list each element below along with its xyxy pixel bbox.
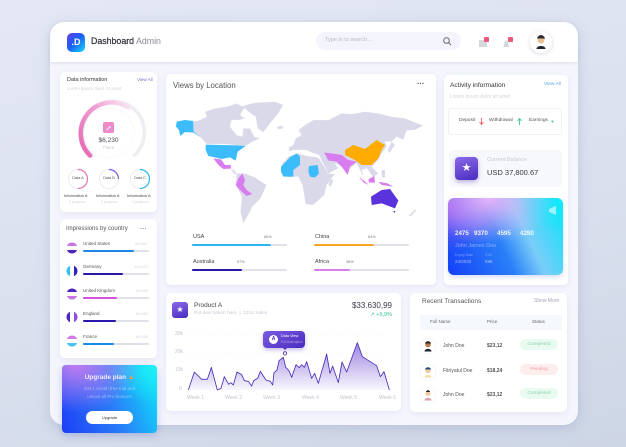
row: united kingdom: [83, 288, 149, 299]
row: france: 60,000: [136, 334, 148, 339]
country flags: [66, 242, 78, 346]
dashboard title: Dashboard Admin: [91, 36, 161, 46]
row 3: [420, 387, 558, 403]
row 2: Pending: [530, 367, 548, 372]
avatar: [420, 387, 436, 403]
gauge: [78, 100, 146, 158]
information captions: 0 progress: [69, 200, 86, 204]
description: unlock all Pro features: [87, 394, 132, 399]
card number: 9370: [474, 230, 488, 237]
deposit: Deposit: [459, 118, 475, 123]
panel: upgrade plan: [62, 365, 157, 433]
description: [84, 386, 135, 399]
information captions: [64, 193, 151, 204]
progress: Africa: [314, 259, 409, 271]
card holder: John James Doe: [455, 243, 496, 249]
row: united states: United States: [83, 241, 110, 246]
progress: Africa: 36%: [346, 260, 354, 264]
logo: [67, 33, 85, 52]
product description: Put description here | 1234 Sales: [194, 311, 267, 316]
tooltip: data view: Put Description: [281, 340, 303, 344]
row: england: 89,081: [136, 311, 148, 316]
table header: Price: [487, 319, 497, 324]
growth figure: ↗ +5,9%: [370, 312, 392, 318]
row 1: Completed: [527, 342, 551, 347]
row: france: France: [83, 334, 97, 339]
heading: Data information: [67, 77, 107, 83]
information captions: Information A: [127, 193, 151, 198]
x axis labels: [187, 394, 396, 400]
subtitle: Lorem ipsum dolor sit amet: [450, 94, 510, 100]
information captions: 0 progress: [101, 200, 118, 204]
panel: data information: [60, 72, 157, 212]
x axis labels: Week 6: [379, 394, 396, 400]
icon: star tile: [172, 302, 188, 318]
show more link: Show More: [534, 298, 559, 304]
card number: 4595: [497, 230, 511, 237]
icon: star tile: [455, 157, 478, 180]
x axis labels: Week 5: [340, 394, 357, 400]
x axis labels: Week 3: [263, 394, 280, 400]
table header: [420, 315, 562, 330]
row: germany: 103,430: [134, 264, 148, 269]
icon: star tile: ★: [176, 305, 184, 314]
icon: mail with badge: [479, 37, 489, 47]
withdrawal arrow: [517, 118, 522, 125]
ring label B: Data B: [103, 176, 115, 180]
search box: Type in to search ...: [325, 37, 373, 43]
y axis labels: 0: [179, 386, 182, 392]
menu dots: ...: [417, 77, 424, 86]
panel: recent transactions: [410, 293, 567, 412]
row 1: [420, 338, 558, 354]
view all link: View All: [544, 82, 561, 87]
panel: product A: [166, 293, 401, 411]
menu dots: ...: [140, 224, 147, 231]
progress: China: 64%: [368, 235, 376, 239]
current balance box: [449, 150, 562, 187]
ring label C: Data C: [134, 176, 146, 180]
logo: .D: [72, 37, 80, 47]
progress: USA: USA: [193, 234, 204, 240]
row 2: Fitriyatul Doe: [443, 368, 472, 374]
row 2: [420, 364, 558, 380]
upgrade button: Upgrade: [102, 415, 117, 420]
row: france: [83, 334, 149, 345]
product price: $33.630,99: [352, 301, 392, 310]
row: germany: [83, 264, 149, 275]
icon: star tile: ★: [462, 162, 471, 174]
card number: [455, 230, 534, 237]
card number: 4280: [520, 230, 534, 237]
row 3: Completed: [527, 391, 551, 396]
panel: impressions by country: [60, 219, 157, 358]
ring label A: Data A: [72, 176, 84, 180]
table header: Full Name: [430, 319, 451, 324]
card expiry: [455, 253, 473, 264]
product title: Product A: [194, 302, 222, 309]
subtitle: Lorem ipsum dolor sit amet: [67, 86, 121, 91]
progress: Australia: Australia: [193, 259, 214, 265]
progress: China: China: [315, 234, 329, 240]
row: germany: Germany: [83, 264, 102, 269]
x axis labels: Week 2: [225, 394, 242, 400]
heading: Activity information: [450, 82, 505, 89]
filter box: [448, 108, 562, 135]
heading: Views by Location: [173, 81, 236, 90]
tooltip: data view: [263, 331, 305, 348]
icon: bell with badge: [503, 37, 513, 47]
tooltip: data view: Data View: [281, 334, 298, 338]
tooltip: data view: A: [272, 336, 275, 342]
main panel: [50, 22, 578, 425]
x axis labels: Week 4: [302, 394, 319, 400]
progress: Australia: 57%: [237, 260, 245, 264]
card cvv: [485, 253, 493, 264]
y axis labels: [175, 331, 183, 392]
panel: views by location: [166, 74, 436, 285]
header bar: [50, 22, 578, 62]
y axis labels: 30k: [175, 331, 183, 337]
information captions: 0 progress: [132, 200, 149, 204]
y axis labels: 10k: [175, 367, 183, 373]
information captions: Information A: [64, 193, 88, 198]
x axis labels: Week 1: [187, 394, 204, 400]
row: england: England: [83, 311, 100, 316]
heading: Upgrade plan ▲: [85, 374, 134, 381]
progress: Australia: [192, 259, 287, 271]
user avatar: [530, 31, 552, 53]
y axis labels: 20k: [175, 349, 183, 355]
table header: Status: [532, 319, 545, 324]
card chip: [549, 206, 556, 215]
row: england: [83, 311, 149, 322]
progress: Africa: Africa: [315, 259, 329, 265]
row 2: $18,24: [487, 368, 502, 374]
row: united states: [83, 241, 149, 252]
deposit arrow: [479, 118, 484, 126]
area chart: [187, 342, 390, 390]
row: united kingdom: 56,999: [136, 288, 148, 293]
balance label: Current Balance: [487, 157, 527, 163]
row 1: John Doe: [443, 343, 464, 349]
card cvv: CVV: [485, 253, 492, 257]
withdrawal: Withdrawal: [489, 118, 513, 123]
data rings: [68, 168, 150, 190]
upgrade button: [86, 411, 133, 424]
progress: China: [314, 234, 409, 246]
row 3: $23,12: [487, 392, 502, 398]
card cvv: 596: [485, 259, 493, 264]
avatar: [420, 364, 436, 380]
earnings: Earnings: [529, 118, 548, 123]
credit card: [448, 198, 563, 275]
gauge value: $6,230: [99, 137, 118, 144]
view all link: View All: [137, 77, 153, 82]
world map: [176, 102, 423, 223]
row 3: John Doe: [443, 392, 464, 398]
row: united kingdom: United Kingdom: [83, 288, 115, 293]
progress: USA: [192, 234, 287, 246]
card expiry: 24/2032: [455, 259, 471, 264]
balance value: USD 37,800.67: [487, 168, 538, 177]
progress: USA: 80%: [264, 235, 272, 239]
row 1: $23,12: [487, 343, 502, 349]
gauge label: Place: [103, 145, 114, 150]
card expiry: Expiry Date: [455, 253, 473, 257]
heading: Impressions by country: [66, 226, 128, 232]
heading: Recent Transactions: [422, 298, 481, 305]
row: united states: 50,000: [135, 241, 147, 246]
description: Get 1 month free trial and: [84, 386, 135, 391]
information captions: Information A: [96, 193, 120, 198]
search box: [316, 32, 461, 50]
card number: 2475: [455, 230, 469, 237]
panel: activity information: [444, 75, 568, 285]
avatar: [420, 338, 436, 354]
earnings dot: [552, 120, 554, 122]
